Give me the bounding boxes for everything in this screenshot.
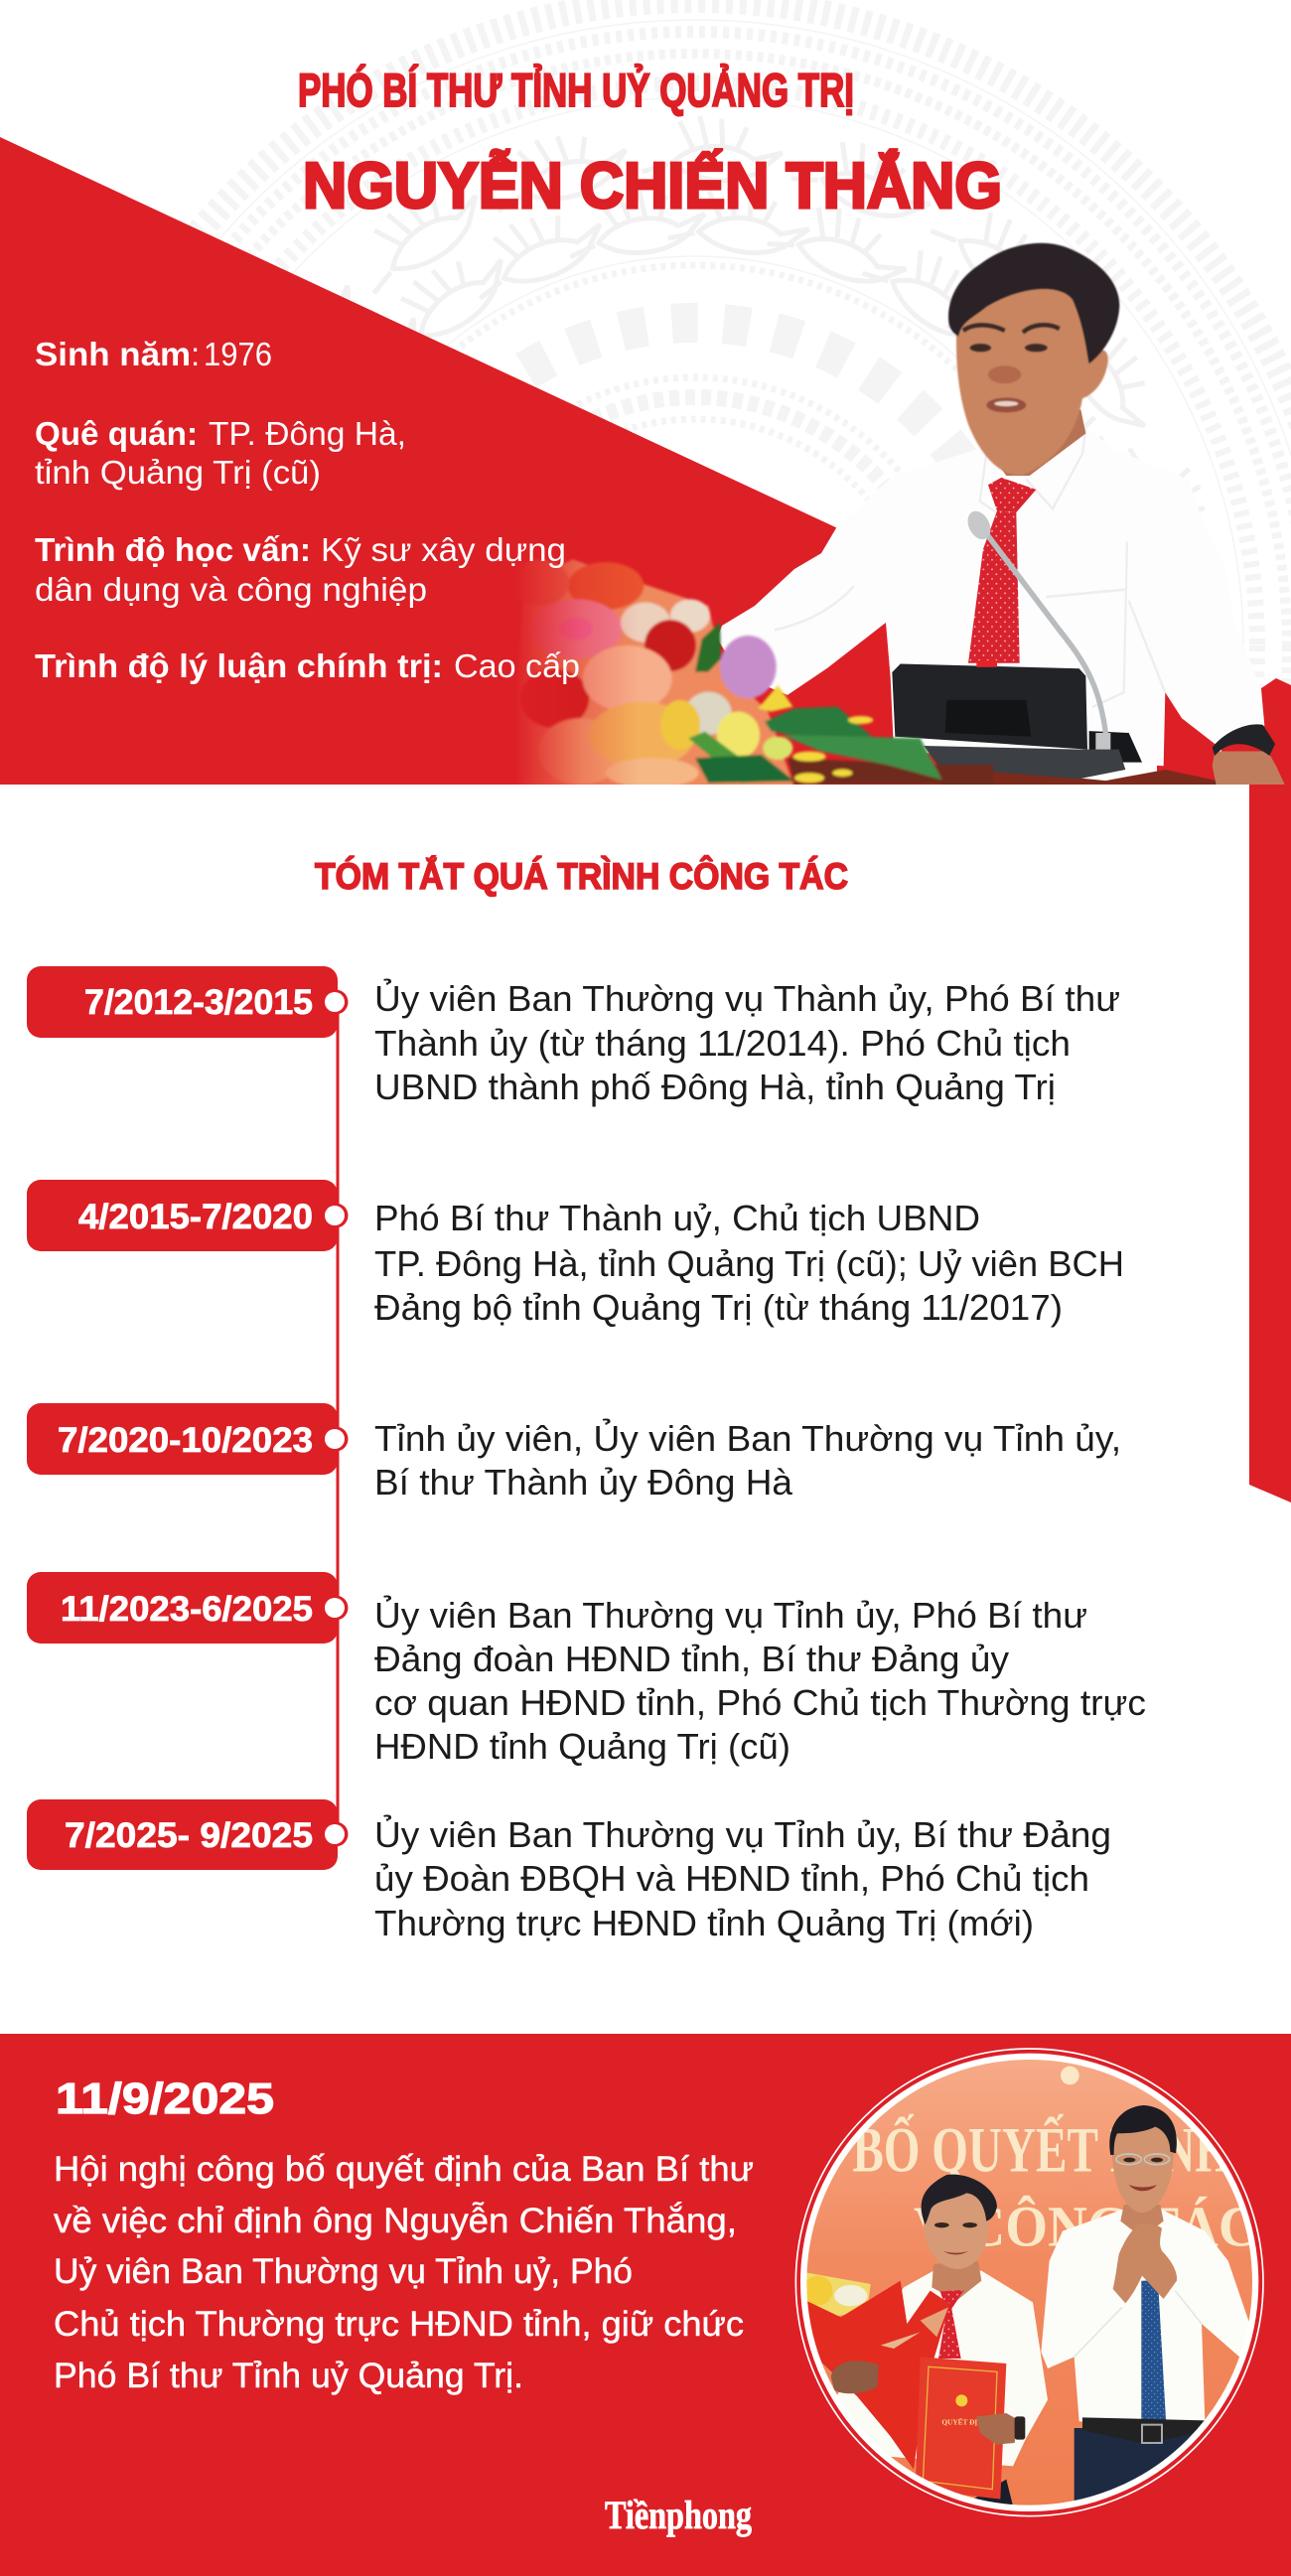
- microphone: [963, 506, 1110, 750]
- base mass: [516, 559, 794, 787]
- personal information block: [35, 336, 580, 684]
- personal information block: Cao cấp: [454, 647, 580, 684]
- timeline item 2: 4/2015-7/2020: [78, 1198, 313, 1236]
- timeline item 1: [27, 966, 1120, 1107]
- timeline item 3: 7/2020-10/2023: [58, 1421, 313, 1460]
- desk: [939, 770, 1216, 785]
- timeline item 5: [27, 1799, 1111, 1943]
- timeline item 2: [27, 1180, 1124, 1328]
- timeline: [27, 966, 1146, 1943]
- timeline item 2: Phó Bí thư Thành uỷ, Chủ tịch UBND: [374, 1198, 980, 1238]
- timeline item 2: Đảng bộ tỉnh Quảng Trị (từ tháng 11/2017): [374, 1287, 1063, 1328]
- personal information block: Trình độ lý luận chính trị:: [35, 647, 443, 684]
- personal information block: 1976: [204, 336, 272, 372]
- shirt: [717, 428, 1264, 766]
- man on the left: [802, 2175, 1048, 2505]
- title: name: NGUYỄN CHIẾN THẮNG: [303, 149, 1002, 221]
- timeline item 4: cơ quan HĐND tỉnh, Phó Chủ tịch Thường trực: [374, 1682, 1146, 1723]
- personal information block: dân dụng và công nghiệp: [35, 571, 427, 608]
- logo: Tiền Phong: Tiềnphong: [605, 2493, 752, 2537]
- timeline item 4: [27, 1572, 1146, 1767]
- timeline item 4: Ủy viên Ban Thường vụ Tỉnh ủy, Phó Bí thư: [374, 1594, 1087, 1636]
- eyes, brows, nose, mouth: [963, 325, 1060, 412]
- circular photo: handover ceremony: [795, 2049, 1263, 2516]
- hair: [948, 243, 1119, 363]
- bottom red panel: [0, 2034, 1291, 2576]
- red diagonal panel: [0, 137, 1291, 785]
- personal information block: Quê quán:: [35, 415, 198, 452]
- timeline item 1: Ủy viên Ban Thường vụ Thành ủy, Phó Bí thư: [374, 977, 1120, 1019]
- timeline item 4: 11/2023-6/2025: [61, 1590, 313, 1629]
- timeline item 4: HĐND tỉnh Quảng Trị (cũ): [374, 1726, 790, 1767]
- portrait photo: speaker at podium: [717, 243, 1289, 794]
- watch and hand: [1212, 724, 1285, 785]
- timeline item 1: Thành ủy (từ tháng 11/2014). Phó Chủ tịch: [374, 1023, 1071, 1064]
- timeline item 5: Thường trực HĐND tỉnh Quảng Trị (mới): [374, 1903, 1034, 1943]
- timeline item 3: Tỉnh ủy viên, Ủy viên Ban Thường vụ Tỉnh ủy,: [374, 1417, 1121, 1459]
- announcement text: Phó Bí thư Tỉnh uỷ Quảng Trị.: [54, 2357, 523, 2395]
- timeline item 3: [27, 1403, 1121, 1503]
- neck: [1001, 409, 1086, 476]
- timeline item 5: ủy Đoàn ĐBQH và HĐND tỉnh, Phó Chủ tịch: [374, 1858, 1089, 1899]
- conference unit: [892, 660, 1142, 779]
- decision folder: QUYẾT ĐỊNH: [941, 2417, 989, 2427]
- timeline item 4: Đảng đoàn HĐND tỉnh, Bí thư Đảng ủy: [374, 1639, 1009, 1679]
- personal information block: Sinh năm: [35, 336, 191, 372]
- personal information block: tỉnh Quảng Trị (cũ): [35, 454, 321, 491]
- right red side strip: [1249, 785, 1291, 1503]
- announcement text: Uỷ viên Ban Thường vụ Tỉnh uỷ, Phó: [54, 2252, 633, 2291]
- heading: career summary: TÓM TẮT QUÁ TRÌNH CÔNG TÁC: [315, 855, 848, 897]
- personal information block: Trình độ học vấn:: [35, 531, 311, 568]
- timeline item 5: 7/2025- 9/2025: [65, 1816, 313, 1855]
- left fade into red: [508, 558, 630, 785]
- date heading: 11/9/2025: [56, 2075, 274, 2123]
- timeline spine: [336, 1002, 340, 1834]
- timeline item 2: TP. Đông Hà, tỉnh Quảng Trị (cũ); Uỷ viên BCH: [374, 1243, 1124, 1284]
- decision folder: [916, 2357, 1006, 2500]
- timeline item 1: UBND thành phố Đông Hà, tỉnh Quảng Trị: [374, 1067, 1056, 1107]
- bouquet: [802, 2272, 950, 2470]
- announcement text: Hội nghị công bố quyết định của Ban Bí thư: [54, 2150, 754, 2189]
- backdrop lettering: V CÔNG TÁC: [914, 2195, 1258, 2259]
- title: position: PHÓ BÍ THƯ TỈNH UỶ QUẢNG TRỊ: [298, 64, 854, 116]
- personal information block: TP. Đông Hà,: [209, 415, 406, 452]
- personal information block: :: [191, 336, 200, 372]
- face: [956, 281, 1108, 475]
- man on the right: [1041, 2105, 1249, 2509]
- flower arrangement: [520, 558, 995, 785]
- personal information block: Kỹ sư xây dựng: [321, 531, 566, 568]
- timeline item 1: 7/2012-3/2015: [84, 983, 313, 1022]
- announcement text: Chủ tịch Thường trực HĐND tỉnh, giữ chức: [54, 2305, 744, 2344]
- backdrop lettering: [852, 2067, 1258, 2259]
- wood behind flowers: [788, 758, 993, 785]
- announcement text: về việc chỉ định ông Nguyễn Chiến Thắng,: [54, 2202, 737, 2240]
- background: bronze drum pattern: [189, 0, 1291, 687]
- tie: [968, 478, 1036, 663]
- timeline item 3: Bí thư Thành ủy Đông Hà: [374, 1462, 793, 1503]
- announcement text: [54, 2150, 754, 2395]
- timeline item 5: Ủy viên Ban Thường vụ Tỉnh ủy, Bí thư Đảng: [374, 1813, 1111, 1855]
